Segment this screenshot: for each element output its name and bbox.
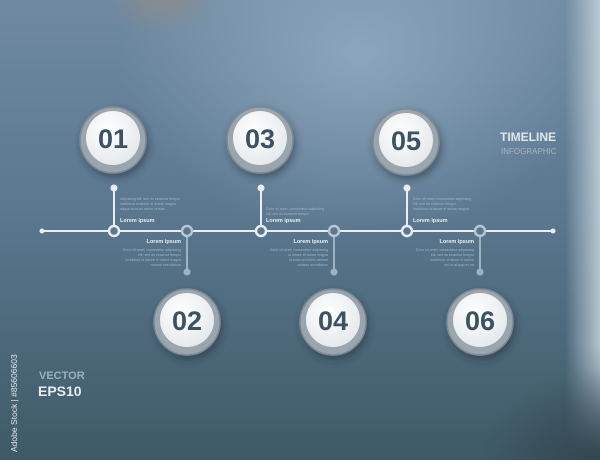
step 03: 03 [245,124,275,154]
step 03: Lorem ipsum [266,218,301,224]
step 06: Lorem ipsum [439,239,474,245]
step 05: 05 [391,126,421,156]
step 01: 01 [98,124,128,154]
step 06: 06 [465,306,495,336]
step 04: Dolor sit amet, consectetur adipiscing [270,248,328,252]
timeline line [40,228,556,234]
step 01 [80,107,181,236]
step 04 [270,226,366,355]
step 02: 02 [172,306,202,336]
step 01: Lorem ipsum [120,218,155,224]
step 04: nostrud exercitation [297,263,328,267]
step 04: Lorem ipsum [293,239,328,245]
step 03: elit, sed do eiusmod tempor [266,212,310,216]
side credit: Adobe Stock | #85606603 [9,354,19,452]
step 04: ut enim ad minim veniam [289,258,328,262]
step 06: elit, sed do eiusmod tempor [431,253,475,257]
step 02: Dolor sit amet, consectetur adipiscing [123,248,181,252]
step 06 [416,226,513,355]
step 05: Lorem ipsum [413,218,448,224]
step 02 [123,226,220,355]
vector label [38,370,85,399]
step 02: Lorem ipsum [146,239,181,245]
title: INFOGRAPHIC [501,147,557,156]
step 05 [373,109,471,236]
step 06: Dolor sit amet, consectetur adipiscing [416,248,474,252]
step 02: elit, sed do eiusmod tempor [138,253,182,257]
step 01: Adipiscing elit, sed do eiusmod tempor [120,197,181,201]
step 02: incididunt ut labore et dolore magna [125,258,181,262]
step 06: nisi ut aliquip ex ea [444,263,474,267]
step 05: elit, sed do eiusmod tempor [413,202,457,206]
step 02: nostrud exercitation [150,263,181,267]
step 05: Dolor sit amet, consectetur adipiscing [413,197,471,201]
vector label: VECTOR [39,370,85,382]
step 06: incididunt ut labore et dolore [430,258,474,262]
step 01: incididunt ut labore et dolore magna [120,202,176,206]
title: TIMELINE [500,130,556,144]
step 01: aliqua enim ad minim veniam [120,207,165,211]
step 04: 04 [318,306,348,336]
step 04: ut labore et dolore magna [288,253,328,257]
step 03: Dolor sit amet, consectetur adipiscing [266,207,324,211]
step 05: incididunt ut labore et dolore magna [413,207,469,211]
step 03 [227,107,324,236]
title [500,130,557,156]
vector label: EPS10 [38,383,82,399]
